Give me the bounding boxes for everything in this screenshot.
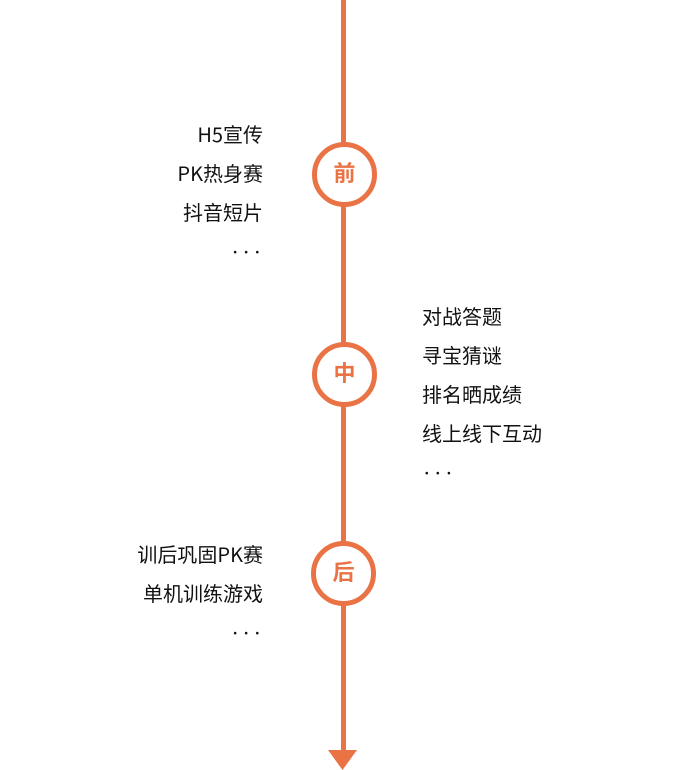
text: H5宣传 xyxy=(197,119,263,148)
timeline vertical line xyxy=(341,0,346,752)
arrowhead xyxy=(328,750,357,770)
text: 抖音短片 xyxy=(183,197,263,226)
text block: during activities xyxy=(422,301,542,480)
stage marker: during: 中 xyxy=(333,356,356,388)
stage marker: during xyxy=(314,344,374,404)
text: PK热身赛 xyxy=(177,158,263,187)
text: 对战答题 xyxy=(422,301,502,330)
stage marker: after xyxy=(314,544,374,604)
text block: after activities xyxy=(137,539,263,640)
text: 排名晒成绩 xyxy=(422,379,522,408)
text: . . . xyxy=(424,451,452,480)
text: 训后巩固PK赛 xyxy=(137,539,263,568)
text: . . . xyxy=(232,230,260,259)
stage marker: after: 后 xyxy=(332,555,355,587)
text: 线上线下互动 xyxy=(422,418,542,447)
text: 单机训练游戏 xyxy=(143,578,263,607)
stage marker: before xyxy=(314,144,374,204)
text: 寻宝猜谜 xyxy=(422,340,502,369)
text: . . . xyxy=(232,611,260,640)
stage marker: before: 前 xyxy=(333,156,356,188)
text block: before activities xyxy=(177,119,263,259)
